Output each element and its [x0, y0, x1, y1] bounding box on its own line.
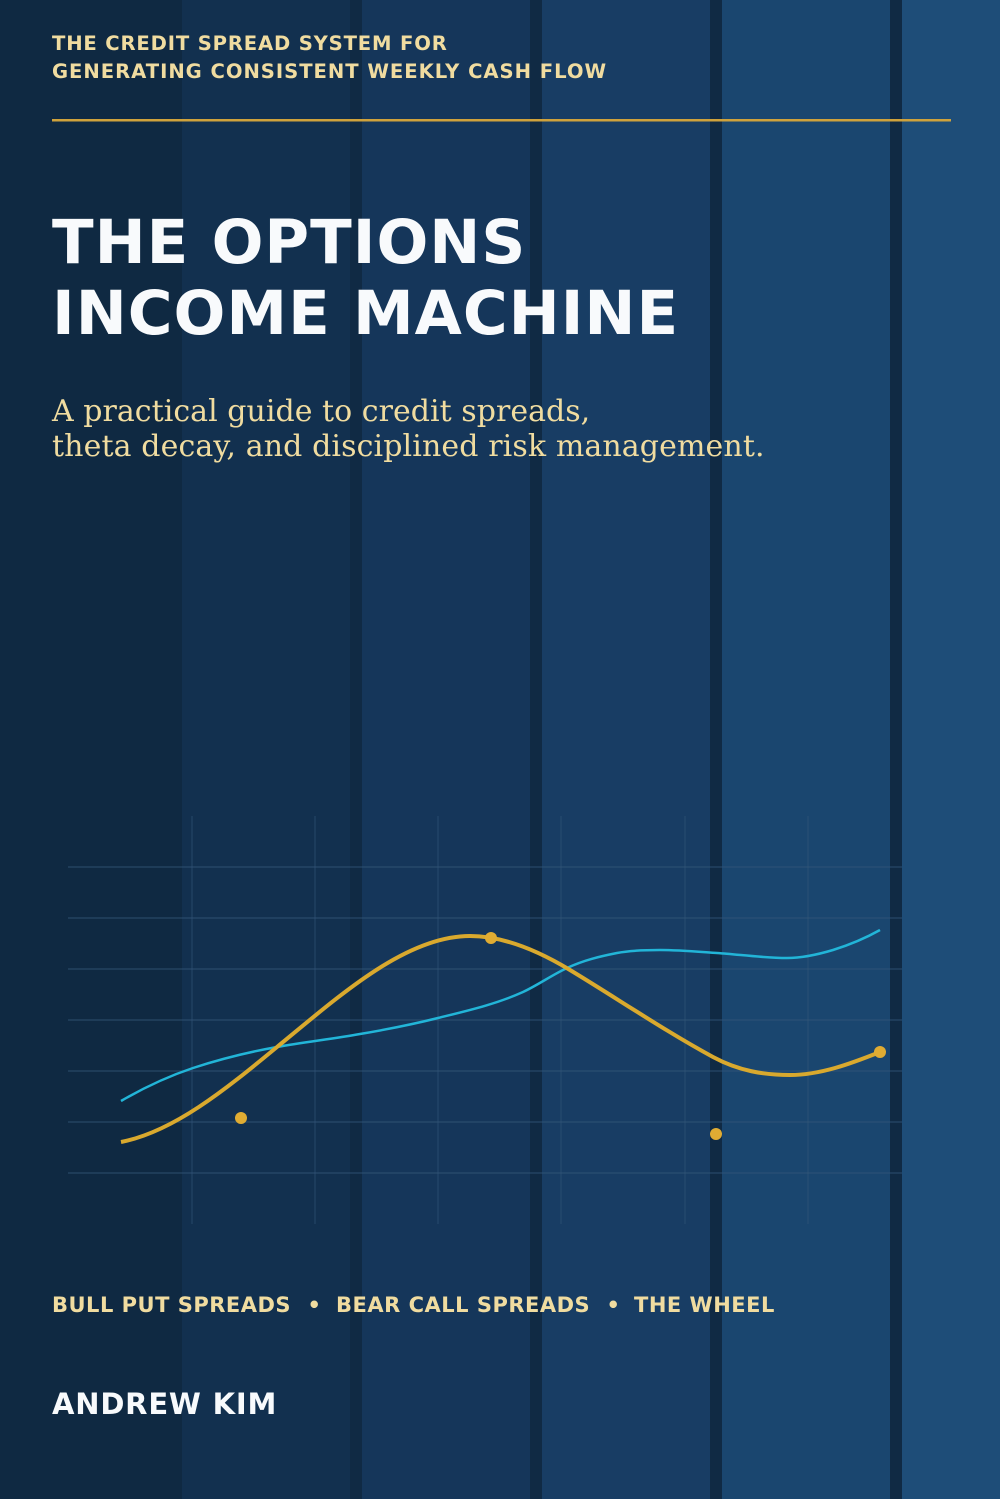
topics line: BULL PUT SPREADS: [52, 1293, 291, 1317]
title: INCOME MACHINE: [52, 278, 679, 349]
topics line: BEAR CALL SPREADS: [336, 1293, 590, 1317]
chart: [68, 816, 902, 1224]
topics line: •: [606, 1293, 620, 1317]
title: [52, 207, 679, 349]
subtitle: theta decay, and disciplined risk management.: [52, 429, 765, 464]
topics line: THE WHEEL: [634, 1293, 775, 1317]
subtitle: A practical guide to credit spreads,: [51, 394, 590, 429]
eyebrow text: THE CREDIT SPREAD SYSTEM FOR: [52, 32, 448, 55]
title: THE OPTIONS: [52, 207, 526, 278]
eyebrow text: GENERATING CONSISTENT WEEKLY CASH FLOW: [52, 60, 607, 83]
topics line: •: [308, 1293, 321, 1317]
cyan curve: [121, 930, 880, 1101]
author: ANDREW KIM: [52, 1387, 277, 1421]
gold markers: [235, 932, 886, 1140]
gold rule: [52, 119, 951, 122]
subtitle: [51, 394, 765, 464]
gold curve: [121, 936, 880, 1142]
eyebrow text: [52, 32, 607, 83]
